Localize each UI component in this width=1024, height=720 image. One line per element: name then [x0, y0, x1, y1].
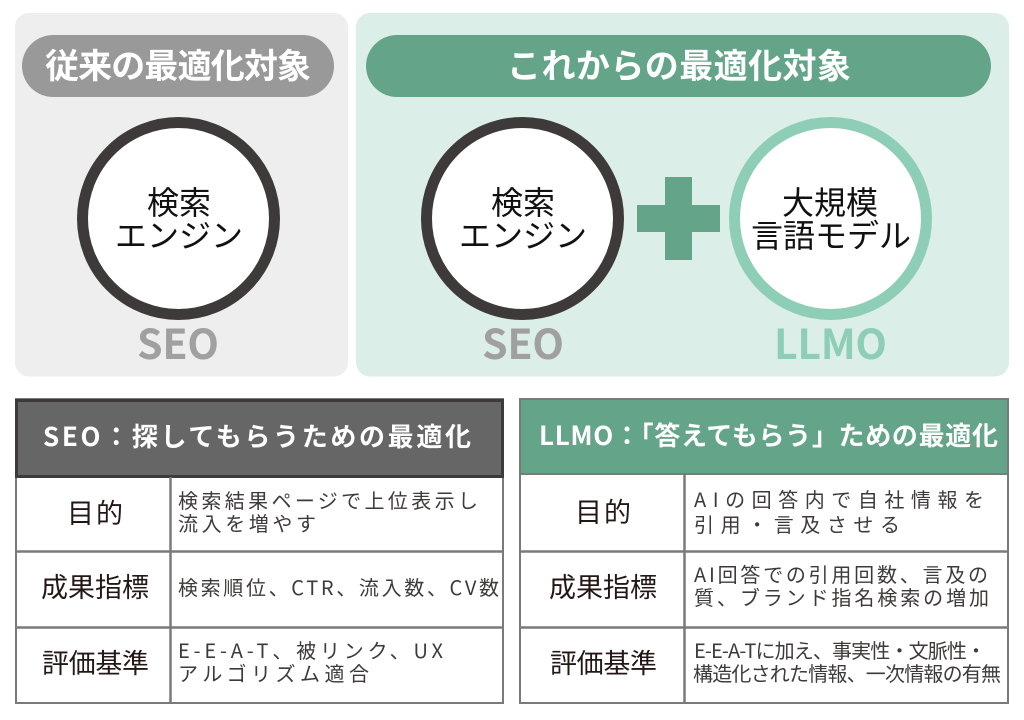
row: evaluation criteria — [550, 635, 1001, 687]
heading pill: future target: これからの最適化対象 — [507, 39, 851, 88]
row: KPI: 成果指標 — [41, 566, 149, 605]
row: evaluation criteria: 評価基準 — [550, 642, 657, 681]
row: purpose: 目的 — [67, 492, 123, 531]
label: SEO: SEO — [137, 311, 219, 371]
icon: plus — [637, 177, 720, 260]
circle: search engine: エンジン — [115, 211, 243, 257]
circle: search engine: 検索 — [147, 178, 211, 224]
row: evaluation criteria: 評価基準 — [42, 642, 149, 681]
row: purpose: 目的 — [575, 491, 631, 530]
table header: LLMO: LLMO：「答えてもらう」ための最適化 — [539, 416, 998, 453]
row: purpose — [67, 485, 478, 537]
row: KPI: AI回答での引用回数、言及の — [694, 559, 988, 588]
row: KPI: 成果指標 — [549, 566, 657, 605]
row: purpose: 検索結果ページで上位表示し — [178, 485, 478, 514]
table header: SEO — [16, 400, 502, 476]
row: KPI — [549, 559, 989, 611]
circle: search engine — [426, 122, 618, 314]
circle: search engine: 検索 — [491, 178, 555, 224]
row: purpose — [575, 484, 984, 538]
heading pill: traditional target — [22, 35, 334, 97]
circle: search engine — [82, 122, 274, 314]
circle: search engine: エンジン — [459, 211, 587, 257]
row: purpose: AIの回答内で自社情報を — [694, 484, 984, 513]
table: LLMO — [520, 399, 1008, 703]
table header: LLMO — [520, 399, 1008, 474]
row: evaluation criteria: E-E-A-T、被リンク、UX — [178, 635, 444, 664]
row: evaluation criteria: E-E-A-Tに加え、事実性・文脈性・ — [694, 635, 986, 664]
heading pill: traditional target: 従来の最適化対象 — [45, 39, 311, 88]
row: evaluation criteria — [42, 635, 444, 687]
circle: large language model: 言語モデル — [751, 211, 911, 257]
heading pill: future target — [366, 35, 991, 97]
row: KPI — [41, 566, 499, 605]
panel: future optimization target — [356, 13, 1009, 376]
label: SEO: SEO — [482, 311, 564, 371]
label: LLMO: LLMO — [774, 311, 887, 371]
circle: large language model: 大規模 — [782, 178, 878, 224]
table header: SEO: SEO：探してもらうための最適化 — [43, 417, 471, 454]
row: evaluation criteria: アルゴリズム適合 — [178, 658, 369, 687]
row: purpose: 流入を増やす — [178, 508, 316, 537]
table: SEO — [16, 399, 503, 703]
circle: large language model — [734, 122, 926, 314]
row: purpose: 引用・言及させる — [694, 509, 900, 538]
row: KPI: 検索順位、CTR、流入数、CV数 — [178, 572, 499, 601]
panel: traditional optimization target — [15, 13, 348, 376]
row: evaluation criteria: 構造化された情報、一次情報の有無 — [693, 658, 1001, 687]
row: KPI: 質、ブランド指名検索の増加 — [694, 582, 989, 611]
